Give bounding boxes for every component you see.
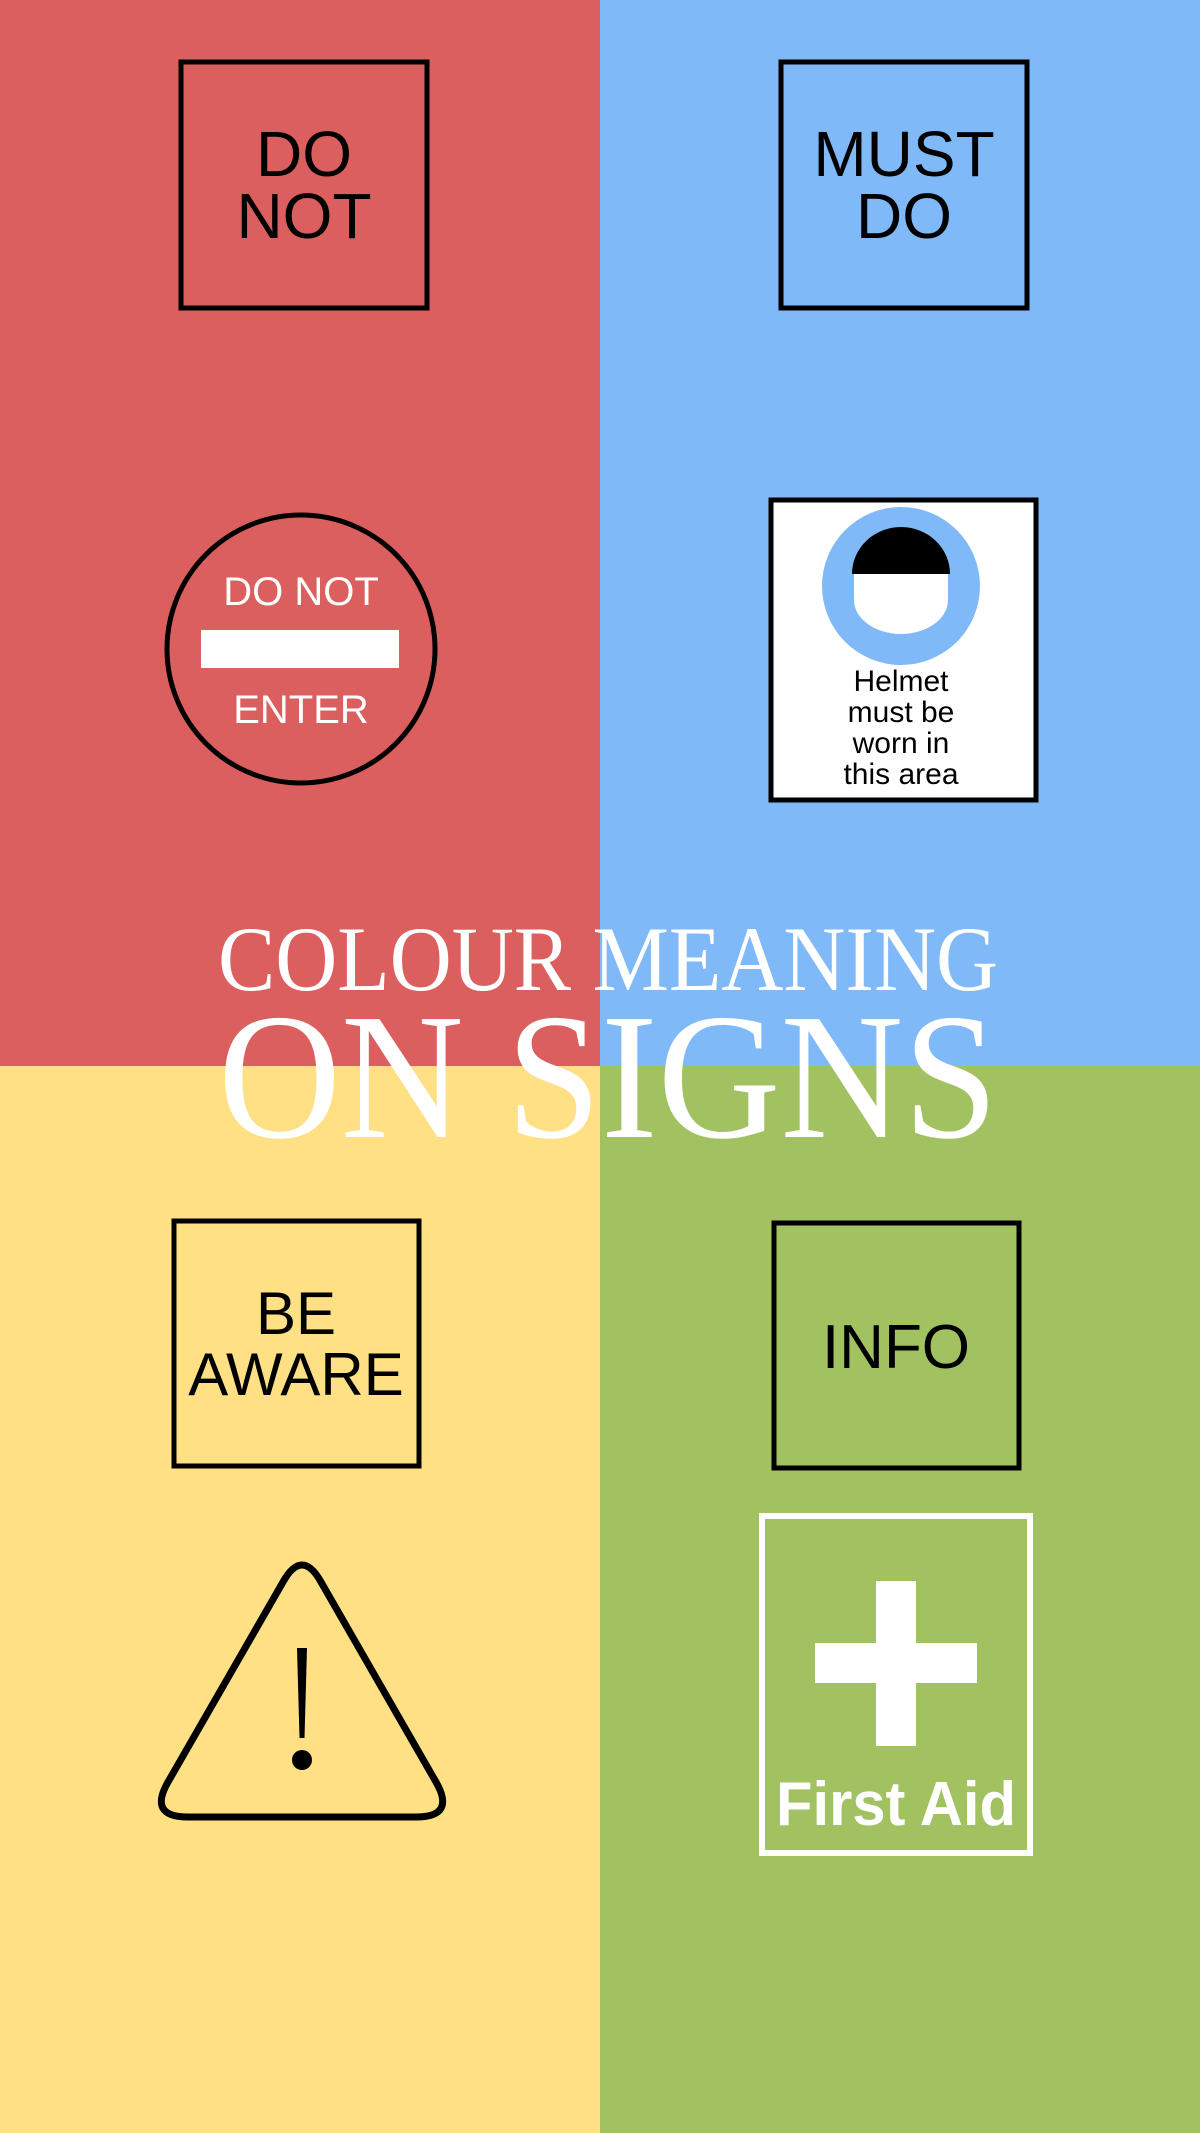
icon: do not enter sign: DO NOT xyxy=(223,570,379,614)
icon: helmet sign: must be xyxy=(848,696,954,729)
sign: MUST DO box xyxy=(781,62,1027,308)
icon: helmet sign: this area xyxy=(843,758,959,791)
icon: first aid sign: First Aid xyxy=(776,1770,1016,1839)
sign: DO NOT box: DO xyxy=(256,118,352,190)
sign: MUST DO box: MUST xyxy=(813,118,995,190)
title: COLOUR MEANING xyxy=(218,908,998,1010)
sign: BE AWARE box xyxy=(174,1221,419,1466)
panel: yellow quadrant xyxy=(0,1066,600,2133)
panel: red quadrant xyxy=(0,0,600,1066)
icon: first aid sign xyxy=(762,1516,1030,1853)
sign: BE AWARE box: AWARE xyxy=(188,1341,404,1408)
sign: INFO box: INFO xyxy=(822,1313,970,1382)
icon: do not enter sign xyxy=(167,515,435,783)
icon: helmet sign: Helmet xyxy=(853,665,949,698)
sign: DO NOT box: NOT xyxy=(236,180,372,252)
sign: MUST DO box: DO xyxy=(856,180,952,252)
sign: INFO box xyxy=(774,1223,1019,1468)
title: ON SIGNS xyxy=(218,977,998,1176)
sign: DO NOT box xyxy=(181,62,427,308)
icon: do not enter sign: ENTER xyxy=(233,688,369,732)
panel: green quadrant xyxy=(600,1066,1200,2133)
icon: warning triangle xyxy=(161,1565,443,1817)
sign: BE AWARE box: BE xyxy=(256,1280,336,1347)
icon: helmet sign xyxy=(771,500,1036,800)
icon: helmet sign: worn in xyxy=(852,727,949,760)
panel: blue quadrant xyxy=(600,0,1200,1066)
